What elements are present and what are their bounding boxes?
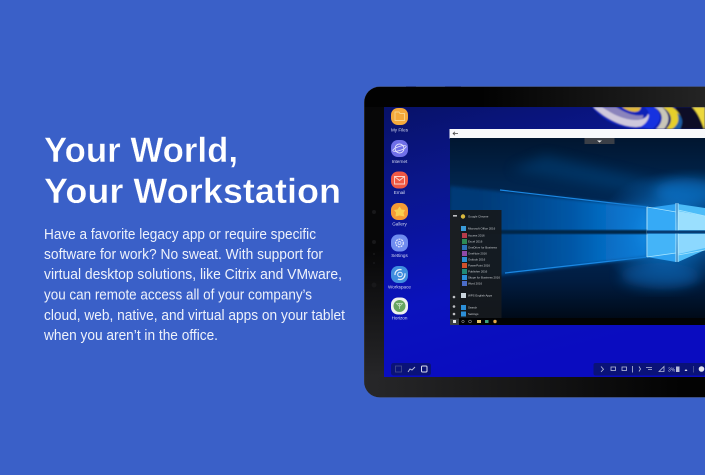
menu entries: Google Chrome: [468, 214, 489, 218]
light beam: [450, 186, 647, 282]
windows taskbar: [450, 318, 705, 325]
camera and sensors: [372, 210, 376, 288]
body text: virtual desktop solutions, like Citrix and VMware,: [44, 267, 342, 283]
menu entries: Microsoft Office 2016: [468, 226, 496, 230]
window title bar: [450, 129, 705, 138]
menu entries: Search: [468, 306, 478, 310]
left dock: [391, 363, 431, 376]
icon: Gallery: Gallery: [392, 222, 407, 226]
menu entries: OneDrive for Business: [468, 246, 497, 250]
tablet body: [364, 86, 705, 398]
wallpaper swirl: [592, 107, 705, 129]
body text: [43, 227, 345, 344]
window panes: [647, 204, 676, 262]
icon: Email: [391, 172, 408, 195]
body text: software for work? No sweat. With support for: [44, 247, 323, 263]
menu entries: Access 2016: [468, 234, 485, 238]
icon: Internet: [391, 140, 408, 164]
icon: Workspace: Workspace: [388, 284, 411, 290]
faint upper ray: [517, 152, 662, 194]
body text: cloud, web, native, and virtual apps on your tablet: [44, 308, 345, 324]
battery percentage: 3%: [668, 368, 676, 374]
tablet: [364, 86, 705, 398]
icon: Internet: Internet: [392, 159, 408, 164]
screen wallpaper: [384, 107, 705, 377]
icon: Email: Email: [394, 190, 405, 195]
title: [44, 130, 341, 211]
menu entries: OneNote 2016: [468, 252, 487, 256]
body text: when you aren’t in the office.: [43, 328, 218, 344]
icon: Settings: Settings: [391, 253, 408, 258]
icon: Settings: [391, 234, 408, 258]
icon: Workspace: [388, 266, 411, 290]
icon: Gallery: [391, 203, 408, 226]
menu entries: [461, 214, 500, 316]
icon: Horizon: [391, 298, 408, 320]
menu rail icons: [453, 215, 457, 315]
menu entries: PowerPoint 2016: [468, 264, 490, 268]
windows 10 wallpaper: [450, 138, 705, 318]
icon: My Files: My Files: [391, 128, 409, 132]
menu entries: Settings: [468, 312, 479, 316]
glow around the window: [613, 176, 705, 288]
menu entries: Word 2016: [468, 282, 482, 286]
icon: Horizon: Horizon: [392, 316, 408, 320]
title: Your Workstation: [44, 171, 341, 211]
body text: Have a favorite legacy app or require specific: [44, 227, 317, 243]
remote desktop window: [450, 129, 705, 325]
body text: you can remote access all of your company’s: [44, 288, 312, 304]
menu entries: WPS English Apps: [468, 294, 493, 298]
title: Your World,: [44, 130, 238, 170]
icon: My Files: [391, 108, 409, 132]
menu entries: Outlook 2016: [468, 258, 486, 262]
app icons: [388, 108, 411, 320]
infographic canvas: [44, 86, 705, 398]
menu entries: Skype for Business 2016: [468, 276, 500, 280]
right dock status bar: [594, 363, 705, 376]
dark horizontal bar: [450, 230, 647, 234]
start menu: [450, 210, 502, 319]
menu entries: Excel 2016: [468, 240, 483, 244]
window pull-down handle: [584, 138, 614, 144]
menu entries: Publisher 2016: [468, 270, 488, 274]
